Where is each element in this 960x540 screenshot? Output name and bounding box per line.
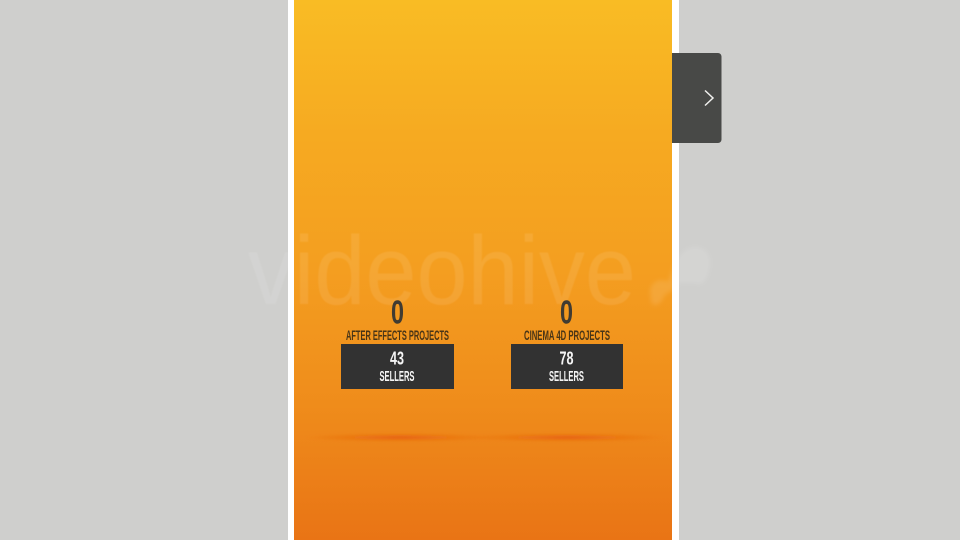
project label: CINEMA 4D PROJECTS	[524, 327, 610, 343]
sellers box	[341, 344, 454, 389]
counter value: 0	[391, 294, 404, 330]
watermark: videohive wordmark: videohive	[248, 216, 636, 325]
sellers box: SELLERS	[549, 368, 584, 385]
watermark: logo blob	[650, 247, 710, 305]
counter value: 0	[560, 294, 573, 330]
stat: after effects projects	[341, 294, 454, 389]
panel: white frame	[288, 0, 679, 540]
navigation tab with chevron	[672, 53, 722, 143]
sellers box	[511, 344, 623, 389]
panel: orange gradient	[294, 0, 672, 540]
sellers box: 78	[560, 348, 574, 368]
floor shadow: left	[305, 433, 495, 442]
stat: cinema 4d projects	[511, 294, 623, 389]
sellers box: 43	[390, 348, 404, 368]
floor shadow: right	[467, 433, 667, 442]
project label: AFTER EFFECTS PROJECTS	[346, 327, 449, 343]
sellers box: SELLERS	[380, 368, 414, 385]
